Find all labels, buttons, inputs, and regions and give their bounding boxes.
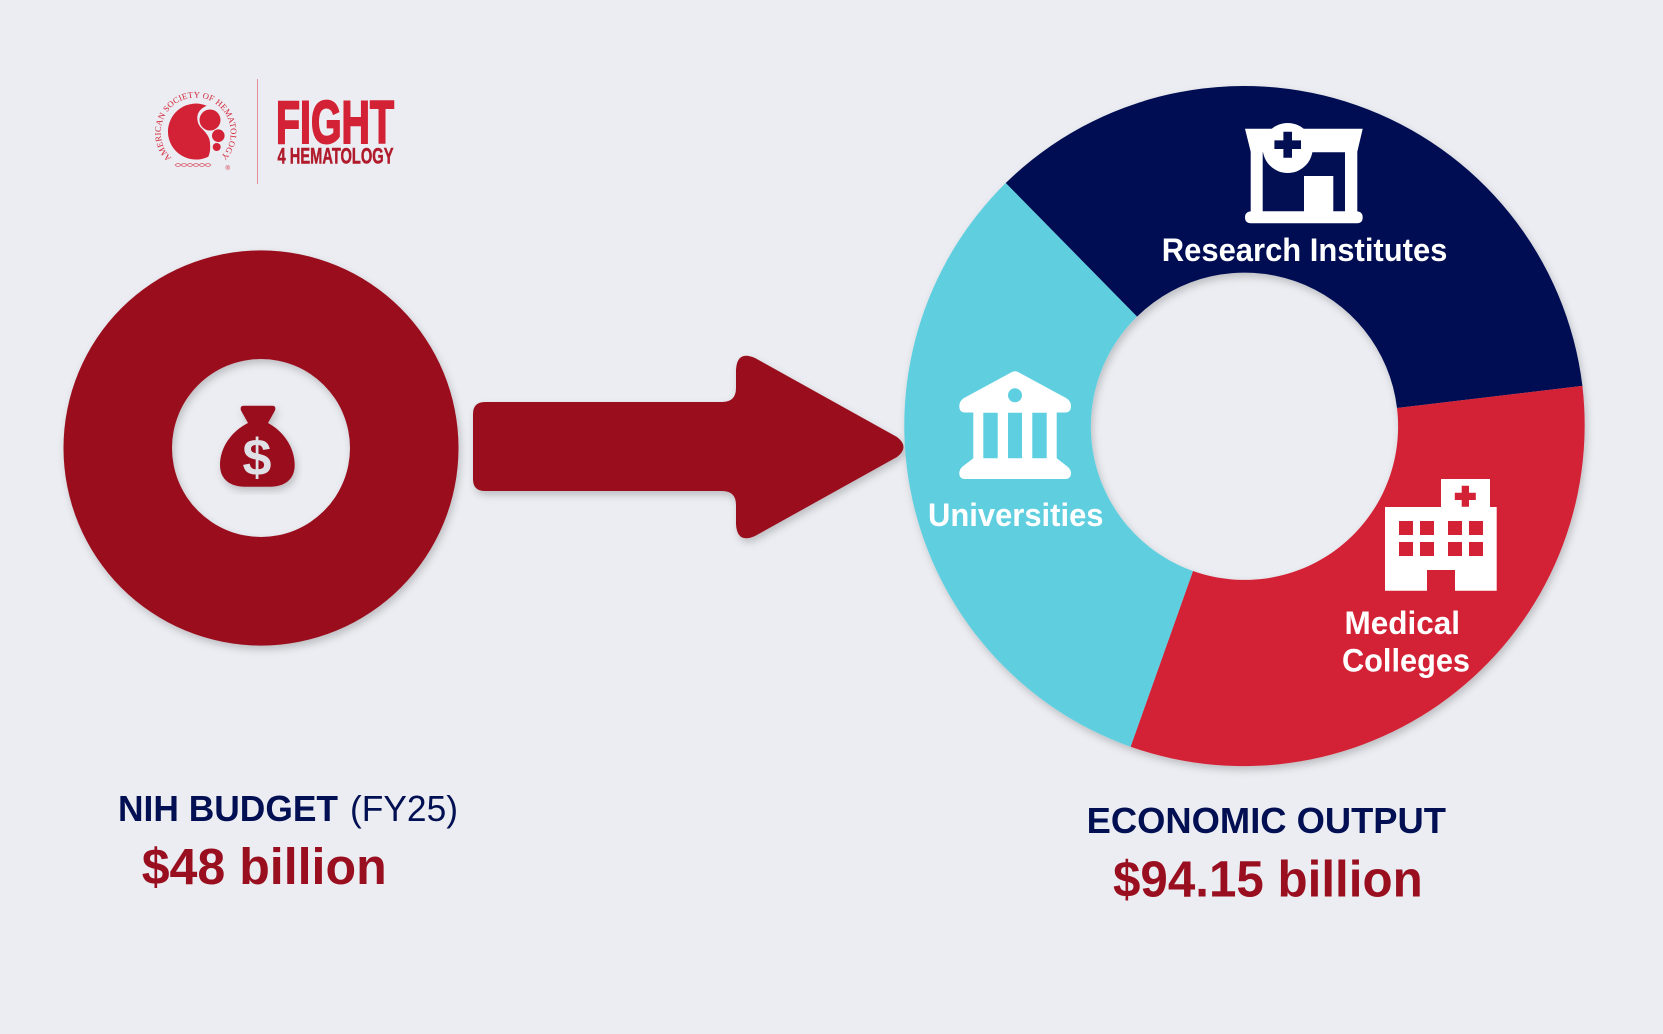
value: economic output amount: $94.15 billion [1113, 851, 1423, 908]
arrow [473, 356, 904, 538]
icon: hospital [1385, 479, 1497, 591]
donut chart: economic output [904, 86, 1585, 766]
segment: research institutes [1006, 86, 1582, 408]
icon: research institute building [1245, 123, 1363, 223]
logo wordmark 4 HEMATOLOGY: 4 HEMATOLOGY [278, 143, 394, 168]
icon: money bag: $ [243, 429, 272, 487]
label: medical colleges [1342, 605, 1470, 678]
logo divider [257, 79, 258, 184]
icon: university building [959, 371, 1071, 479]
label: universities: Universities [928, 497, 1104, 533]
logo wordmark FIGHT: FIGHT [276, 89, 394, 156]
segment: medical colleges [1131, 386, 1585, 766]
label: research institutes: Research Institutes [1162, 232, 1447, 268]
label: medical colleges: Colleges [1342, 642, 1470, 678]
value: NIH budget amount: $48 billion [142, 838, 387, 895]
NIH budget ring [63, 250, 458, 646]
label: medical colleges: Medical [1344, 605, 1460, 641]
heading: NIH budget: NIH BUDGET [118, 788, 338, 829]
icon: money bag [220, 406, 295, 487]
logo: American Society of Hematology seal: AMERICAN SOCIETY OF HEMATOLOGY [155, 92, 236, 160]
heading: NIH budget: (FY25) [350, 788, 458, 829]
logo: American Society of Hematology seal: ® [226, 165, 230, 172]
segment: universities [904, 183, 1193, 747]
heading: NIH budget [118, 788, 458, 829]
heading: economic output: ECONOMIC OUTPUT [1087, 800, 1446, 841]
logo: Fight 4 Hematology [155, 79, 394, 184]
